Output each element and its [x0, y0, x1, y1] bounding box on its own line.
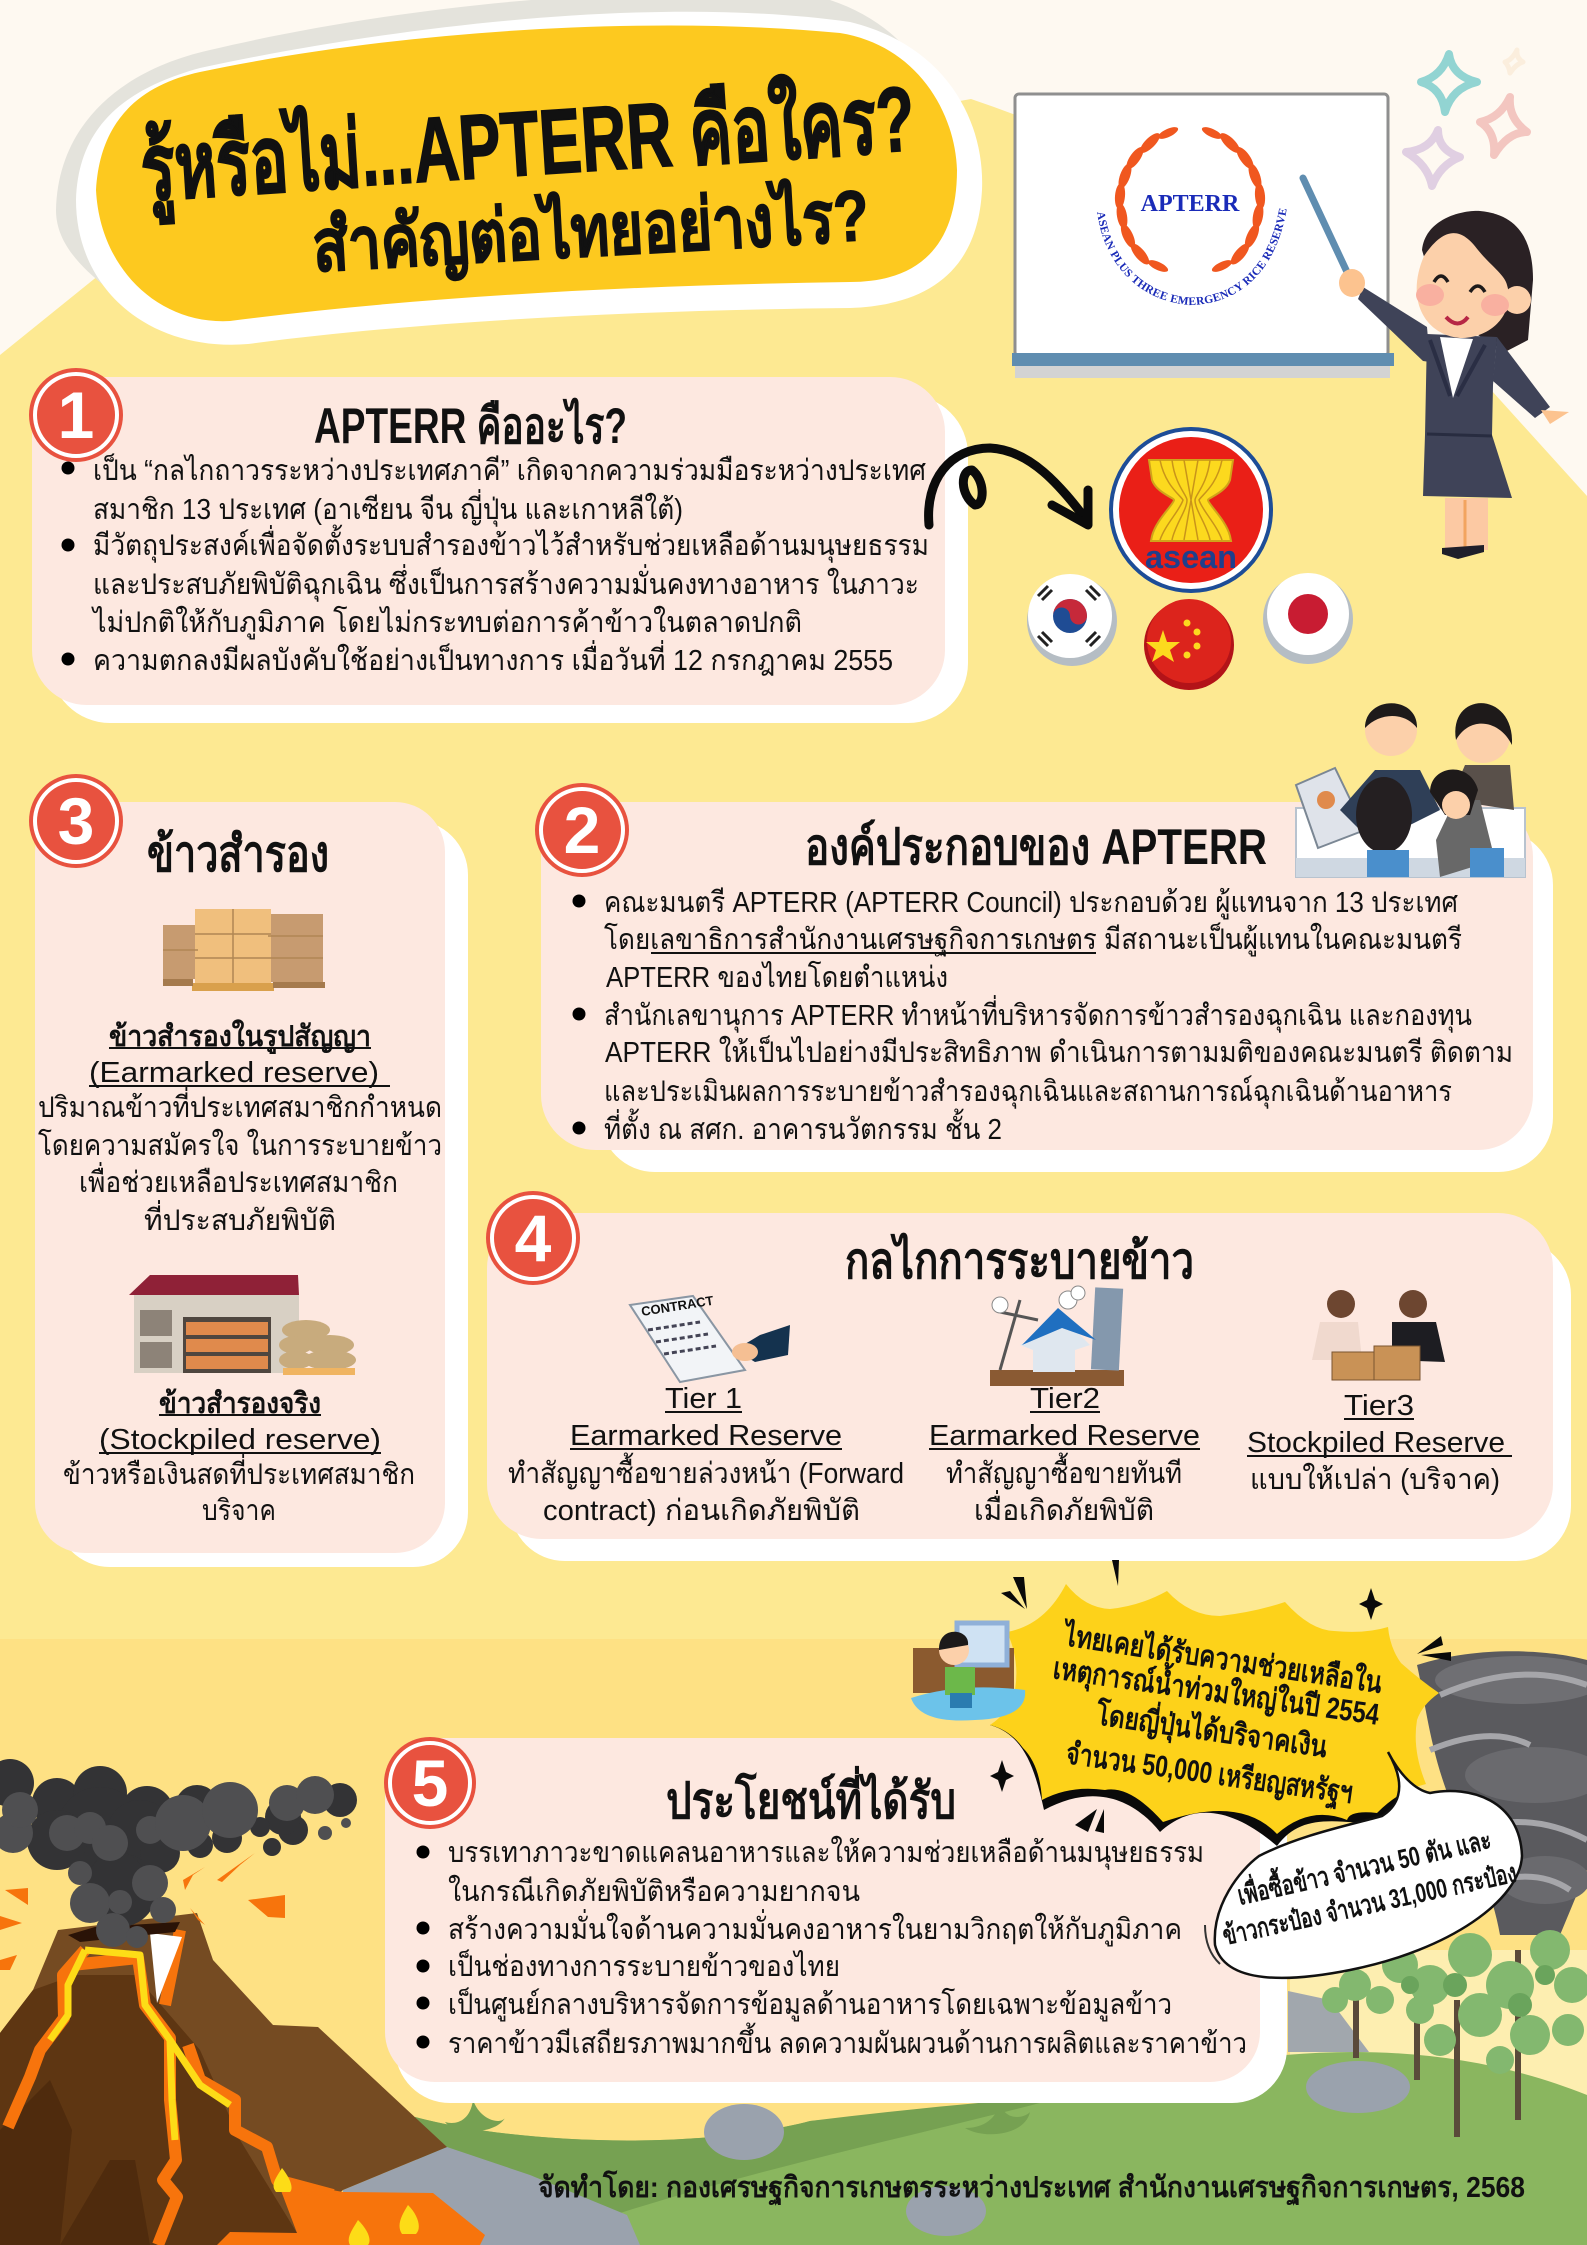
panel 3 heading: ข้าวสำรอง — [147, 826, 329, 882]
sparkles — [1406, 50, 1527, 186]
panel 4 badge — [486, 1191, 580, 1285]
earmarked reserve block: ปริมาณข้าวที่ประเทศสมาชิกกำหนด — [38, 1087, 442, 1124]
logo circular text: ASEAN PLUS THREE EMERGENCY RICE RESERVE — [1097, 208, 1287, 306]
volcano — [0, 1913, 485, 2245]
panel 1 bullets: ไม่ปกติให้กับภูมิภาค โดยไม่กระทบต่อการค้าข้าวในตลาดปกติ — [91, 605, 802, 640]
logo name: APTERR — [1141, 191, 1240, 217]
icon: cartons on pallets — [163, 909, 325, 991]
panel 2 bullets — [572, 887, 1513, 1146]
panel 2 bullets: สำนักเลขานุการ APTERR ทำหน้าที่บริหารจัดการข้าวสำรองฉุกเฉิน และกองทุน — [604, 995, 1472, 1033]
burst accent marks — [990, 1560, 1451, 1833]
panel 5 bullets: เป็นช่องทางการระบายข้าวของไทย — [448, 1948, 840, 1983]
panel 2 bullets: และประเมินผลการระบายข้าวสำรองฉุกเฉินและสถานการณ์ฉุกเฉินด้านอาหาร — [604, 1075, 1452, 1109]
icon: donation people — [1312, 1290, 1445, 1380]
flag: Japan — [1263, 573, 1353, 664]
panel 5 heading: ประโยชน์ที่ได้รับ — [666, 1766, 956, 1829]
flag: China — [1144, 599, 1234, 690]
panel 5 bullets: บรรเทาภาวะขาดแคลนอาหารและให้ความช่วยเหลือด้านมนุษยธรรม — [448, 1835, 1204, 1870]
logo wreath — [1114, 125, 1266, 274]
tier 2: Tier2 — [1030, 1383, 1100, 1415]
tier 3: Tier3 — [1344, 1390, 1414, 1422]
tier 1: Tier 1 — [665, 1383, 742, 1415]
callout: aid burst: โดยญี่ปุ่นได้บริจาคเงิน — [1093, 1692, 1331, 1766]
panel 5 bullets: ราคาข้าวมีเสถียรภาพมากขึ้น ลดความผันผวนด้านการผลิตและราคาข้าว — [448, 2022, 1247, 2060]
tier 1: contract) ก่อนเกิดภัยพิบัติ — [543, 1495, 860, 1527]
flames — [274, 2168, 419, 2245]
gray boulders — [704, 2061, 1410, 2236]
panel 1 bullets: ความตกลงมีผลบังคับใช้อย่างเป็นทางการ เมื่อวันที่ 12 กรกฎาคม 2555 — [93, 640, 893, 677]
tier 3: แบบให้เปล่า (บริจาค) — [1250, 1462, 1500, 1496]
panel 5 bullets: สร้างความมั่นใจด้านความมั่นคงอาหารในยามวิกฤตให้กับภูมิภาค — [448, 1909, 1182, 1947]
lava pool — [217, 2180, 485, 2245]
tier 2: Earmarked Reserve — [929, 1420, 1200, 1452]
panel 4 heading: กลไกการระบายข้าว — [845, 1232, 1194, 1289]
callout: aid burst: ไทยเคยได้รับความช่วยเหลือใน — [1060, 1617, 1385, 1700]
icon: meeting illustration — [1296, 703, 1525, 877]
panel 5 bullets: ในกรณีเกิดภัยพิบัติหรือความยากจน — [448, 1874, 860, 1908]
earmarked reserve block: เพื่อช่วยเหลือประเทศสมาชิก — [79, 1162, 398, 1199]
panel 1 bullets: มีวัตถุประสงค์เพื่อจัดตั้งระบบสำรองข้าวไว้สำหรับช่วยเหลือด้านมนุษยธรรม — [93, 524, 929, 563]
lava streams — [8, 1930, 333, 2245]
stockpiled reserve block: ข้าวหรือเงินสดที่ประเทศสมาชิก — [63, 1454, 415, 1491]
trees — [1288, 1930, 1587, 2137]
panel 1 heading: APTERR คืออะไร? — [314, 397, 627, 454]
whiteboard with APTERR logo — [1012, 92, 1394, 378]
panel 3: rice reserve — [29, 774, 468, 1567]
panel 2: components of APTERR — [535, 703, 1553, 1172]
ground: green hill — [340, 2052, 1587, 2245]
callout: aid burst — [990, 1560, 1451, 1846]
panel 1 badge — [29, 368, 123, 462]
stockpiled reserve block: ข้าวสำรองจริง — [159, 1388, 321, 1420]
panel 2 badge — [535, 783, 629, 877]
asean wordmark: asean — [1145, 539, 1237, 575]
volcanic embers — [0, 1853, 285, 1970]
panel 5 bullets: เป็นศูนย์กลางบริหารจัดการข้อมูลด้านอาหารโดยเฉพาะข้อมูลข้าว — [448, 1986, 1172, 2022]
panel 1 bullets: เป็น “กลไกถาวรระหว่างประเทศภาคี” เกิดจากความร่วมมือระหว่างประเทศ — [93, 452, 927, 487]
panel 2 heading: องค์ประกอบของ APTERR — [805, 819, 1267, 875]
flag: Korea — [1027, 574, 1117, 666]
tier 1: ทำสัญญาซื้อขายล่วงหน้า (Forward — [508, 1452, 904, 1490]
panel 5 badge — [384, 1737, 476, 1829]
panel 5 badge: 5 — [412, 1746, 448, 1820]
stockpiled reserve block — [63, 1388, 415, 1527]
presenter woman — [1339, 211, 1569, 559]
icon: flooded room person — [911, 1623, 1025, 1721]
tier 3: Stockpiled Reserve — [1247, 1427, 1505, 1459]
tier 3 — [1247, 1390, 1512, 1496]
title line 1: รู้หรือไม่...APTERR คือใคร? — [138, 66, 918, 226]
panel 2 bullets: โดยเลขาธิการสำนักงานเศรษฐกิจการเกษตร มีสถานะเป็นผู้แทนในคณะมนตรี — [604, 921, 1462, 957]
panel 2 bullets: ที่ตั้ง ณ สศก. อาคารนวัตกรรม ชั้น 2 — [604, 1108, 1002, 1146]
icon: contract: CONTRACT — [640, 1293, 715, 1319]
speech bubble — [1205, 1752, 1522, 1978]
panel 1: what is APTERR — [29, 368, 968, 723]
ASEAN emblem — [1111, 429, 1271, 591]
earmarked reserve block: ที่ประสบภัยพิบัติ — [144, 1200, 336, 1237]
panel 5 bullets — [416, 1835, 1247, 2060]
tier 1 — [508, 1383, 904, 1527]
panel 2 badge: 2 — [564, 793, 600, 867]
panel 2 bullets: APTERR ให้เป็นไปอย่างมีประสิทธิภาพ ดำเนินการตามมติของคณะมนตรี ติดตาม — [605, 1034, 1513, 1069]
stockpiled reserve block: (Stockpiled reserve) — [99, 1424, 381, 1456]
tornado — [1417, 1651, 1587, 1935]
earmarked reserve block — [38, 1019, 442, 1237]
tier 2 — [929, 1383, 1200, 1527]
icon: warehouse — [129, 1275, 356, 1375]
tier 2: เมื่อเกิดภัยพิบัติ — [974, 1490, 1154, 1527]
earmarked reserve block: (Earmarked reserve) — [89, 1057, 379, 1089]
callout: aid burst: เหตุการณ์น้ำท่วมใหญ่ในปี 2554 — [1051, 1645, 1383, 1734]
panel 5: benefits — [384, 1737, 1287, 2103]
panel 3 badge: 3 — [58, 784, 94, 858]
title line 2: สำคัญต่อไทยอย่างไร? — [310, 173, 871, 289]
panel 2 bullets: คณะมนตรี APTERR (APTERR Council) ประกอบด้วย ผู้แทนจาก 13 ประเทศ — [604, 887, 1459, 920]
panel 1 badge: 1 — [58, 378, 94, 452]
panel 1 bullets: และประสบภัยพิบัติฉุกเฉิน ซึ่งเป็นการสร้างความมั่นคงทางอาหาร ในภาวะ — [93, 564, 919, 602]
tier 1: Earmarked Reserve — [570, 1420, 842, 1452]
earmarked reserve block: ข้าวสำรองในรูปสัญญา — [109, 1019, 371, 1054]
panel 3 badge — [29, 774, 123, 868]
panel 4: release mechanism — [486, 1191, 1571, 1561]
tier 2: ทำสัญญาซื้อขายทันที — [946, 1452, 1182, 1490]
pointer — [1303, 178, 1347, 272]
curly arrow — [929, 448, 1088, 525]
panel 4 badge: 4 — [515, 1201, 552, 1275]
stockpiled reserve block: บริจาค — [202, 1495, 276, 1527]
panel 1 bullets: สมาชิก 13 ประเทศ (อาเซียน จีน ญี่ปุ่น และเกาหลีใต้) — [93, 489, 683, 527]
panel 2 bullets: APTERR ของไทยโดยตำแหน่ง — [606, 960, 948, 994]
speech bubble: เพื่อซื้อข้าว จำนวน 50 ตัน และ — [1233, 1819, 1494, 1911]
title blob — [56, 0, 982, 345]
icon: storm damaged house — [990, 1286, 1124, 1386]
volcano smoke — [0, 1759, 357, 1948]
icon: contract — [630, 1293, 790, 1382]
crater — [150, 1933, 182, 2003]
earmarked reserve block: โดยความสมัครใจ ในการระบายข้าว — [38, 1128, 442, 1162]
callout: aid burst: จำนวน 50,000 เหรียญสหรัฐฯ — [1064, 1737, 1355, 1813]
panel 1 bullets — [62, 452, 929, 677]
